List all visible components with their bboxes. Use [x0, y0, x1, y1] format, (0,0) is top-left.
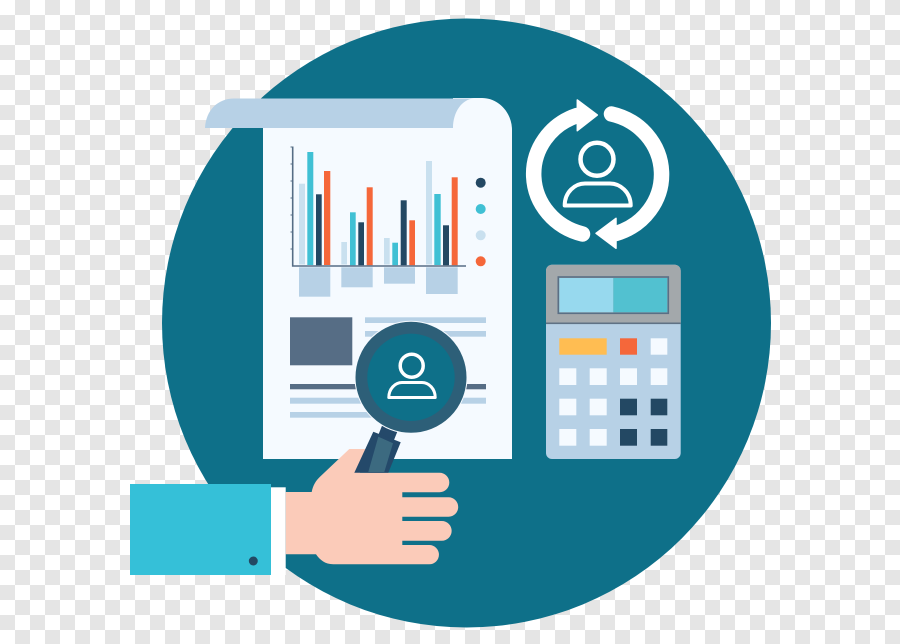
- magnifier handle grip: [368, 437, 393, 472]
- sleeve button: [249, 556, 258, 566]
- magnifier lens ring: [355, 321, 467, 433]
- hand holding magnifier: [130, 321, 467, 575]
- suit sleeve: [130, 484, 271, 575]
- chart legend: [476, 178, 486, 266]
- chart lower blocks: [299, 267, 458, 297]
- calculator top: [546, 265, 681, 323]
- hand palm and thumb: [286, 449, 458, 564]
- calculator body: [546, 265, 681, 459]
- icon: user refresh cycle: [534, 100, 662, 248]
- icon: user: [565, 143, 631, 206]
- magnifier: [354, 321, 467, 473]
- magnifier handle: [354, 432, 401, 473]
- teal background circle: [162, 18, 771, 628]
- document page: [263, 98, 512, 459]
- calculator screen: [558, 277, 668, 313]
- rolled page top: [205, 98, 474, 128]
- magnifier neck: [378, 425, 397, 442]
- icon: user in lens: [389, 354, 435, 398]
- magnifier lens: [367, 334, 455, 421]
- image placeholder block: [290, 317, 352, 365]
- text lines: [290, 317, 486, 418]
- arrow: left arc: [534, 100, 597, 234]
- bar chart: [290, 146, 466, 266]
- panel: report document: [205, 98, 512, 459]
- arrow: right arc: [596, 114, 662, 248]
- calculator keys: [559, 338, 667, 446]
- panel: calculator: [546, 265, 681, 459]
- shirt cuff: [271, 487, 286, 575]
